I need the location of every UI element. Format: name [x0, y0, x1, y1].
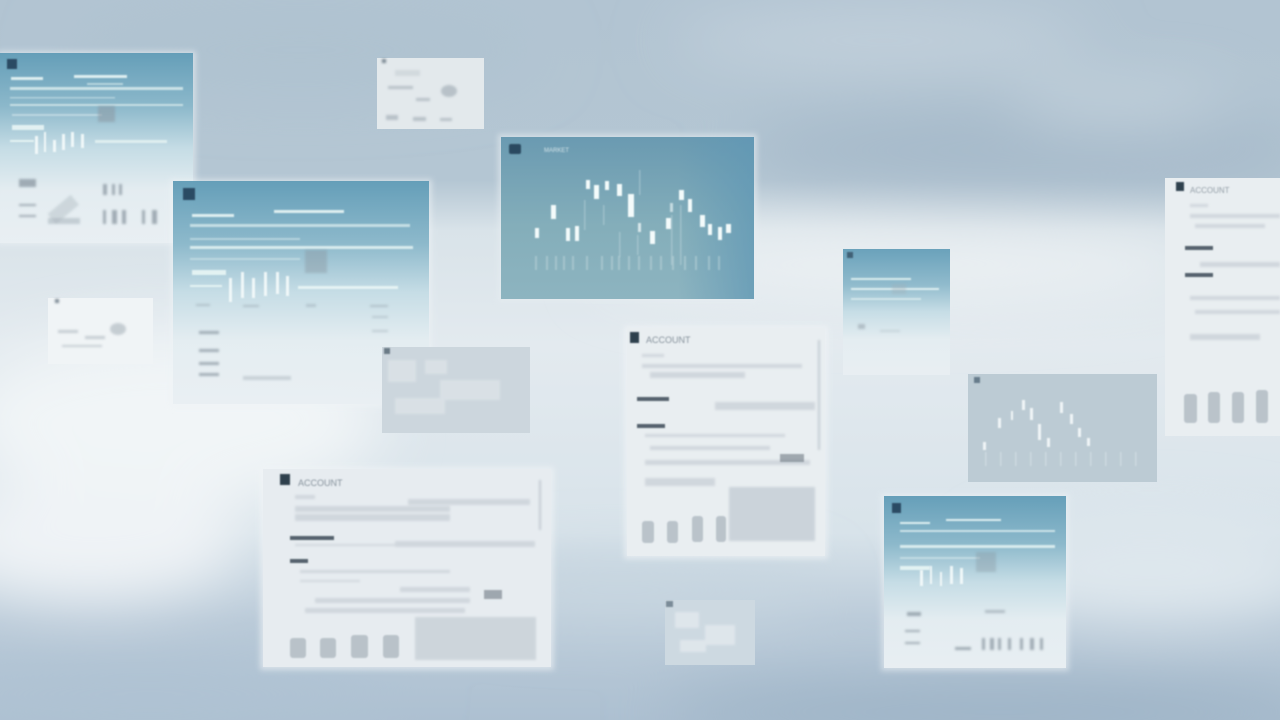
panel: faint thumbnail bottom: [665, 600, 755, 665]
section headings: [290, 536, 502, 599]
panel title: ACCOUNT: [298, 478, 343, 488]
text lines: [10, 75, 183, 143]
bar icons: [1184, 390, 1268, 423]
text lines: [190, 210, 413, 289]
panel: grey thumbnail: [382, 347, 530, 433]
chart title: MARKET: [544, 148, 569, 154]
panel: blue report bottom right: [881, 494, 1069, 671]
panel: blue report center left: [170, 179, 432, 407]
icon: panel badge: [7, 59, 17, 69]
candles: [535, 180, 731, 244]
panel: grey candlestick chart: [968, 374, 1157, 482]
volume bars: [535, 256, 720, 270]
panel: small blue report: [843, 249, 950, 375]
candles: [983, 400, 1090, 450]
icon: panel badge: [630, 332, 639, 343]
panel: blue report top left: [0, 51, 196, 245]
dark blocks and bars: [905, 552, 1043, 650]
panel: white thumbnail top: [377, 58, 484, 129]
panel: candlestick chart: [498, 134, 757, 302]
panel: white report center: [624, 326, 828, 559]
icon: panel badge: [892, 503, 901, 513]
chart: mini candles: [35, 132, 84, 154]
text lines: [642, 340, 820, 541]
panel: white report right edge: [1165, 178, 1280, 436]
volume bars: [985, 452, 1136, 466]
chart: mini candles: [920, 566, 963, 586]
chart: mini candles: [229, 272, 289, 302]
bar icons: [290, 635, 399, 658]
panel: white report bottom: [260, 467, 554, 670]
dark blocks and bars: [19, 106, 157, 224]
section headings: [637, 397, 804, 462]
dark blocks and bars: [196, 250, 388, 380]
wicks: [584, 170, 682, 265]
icon: panel badge: [1176, 182, 1184, 191]
text lines: [900, 519, 1055, 570]
panel title: ACCOUNT: [1190, 186, 1230, 195]
icon: panel badge: [280, 474, 290, 485]
text lines: [295, 480, 541, 660]
icon: chart badge: [509, 144, 521, 154]
panel title: ACCOUNT: [646, 335, 691, 345]
icon: panel badge: [183, 188, 195, 200]
panel: white thumbnail left: [48, 298, 153, 364]
bar icons: [642, 516, 726, 543]
section headings: [1185, 246, 1213, 277]
text lines: [1190, 204, 1280, 340]
